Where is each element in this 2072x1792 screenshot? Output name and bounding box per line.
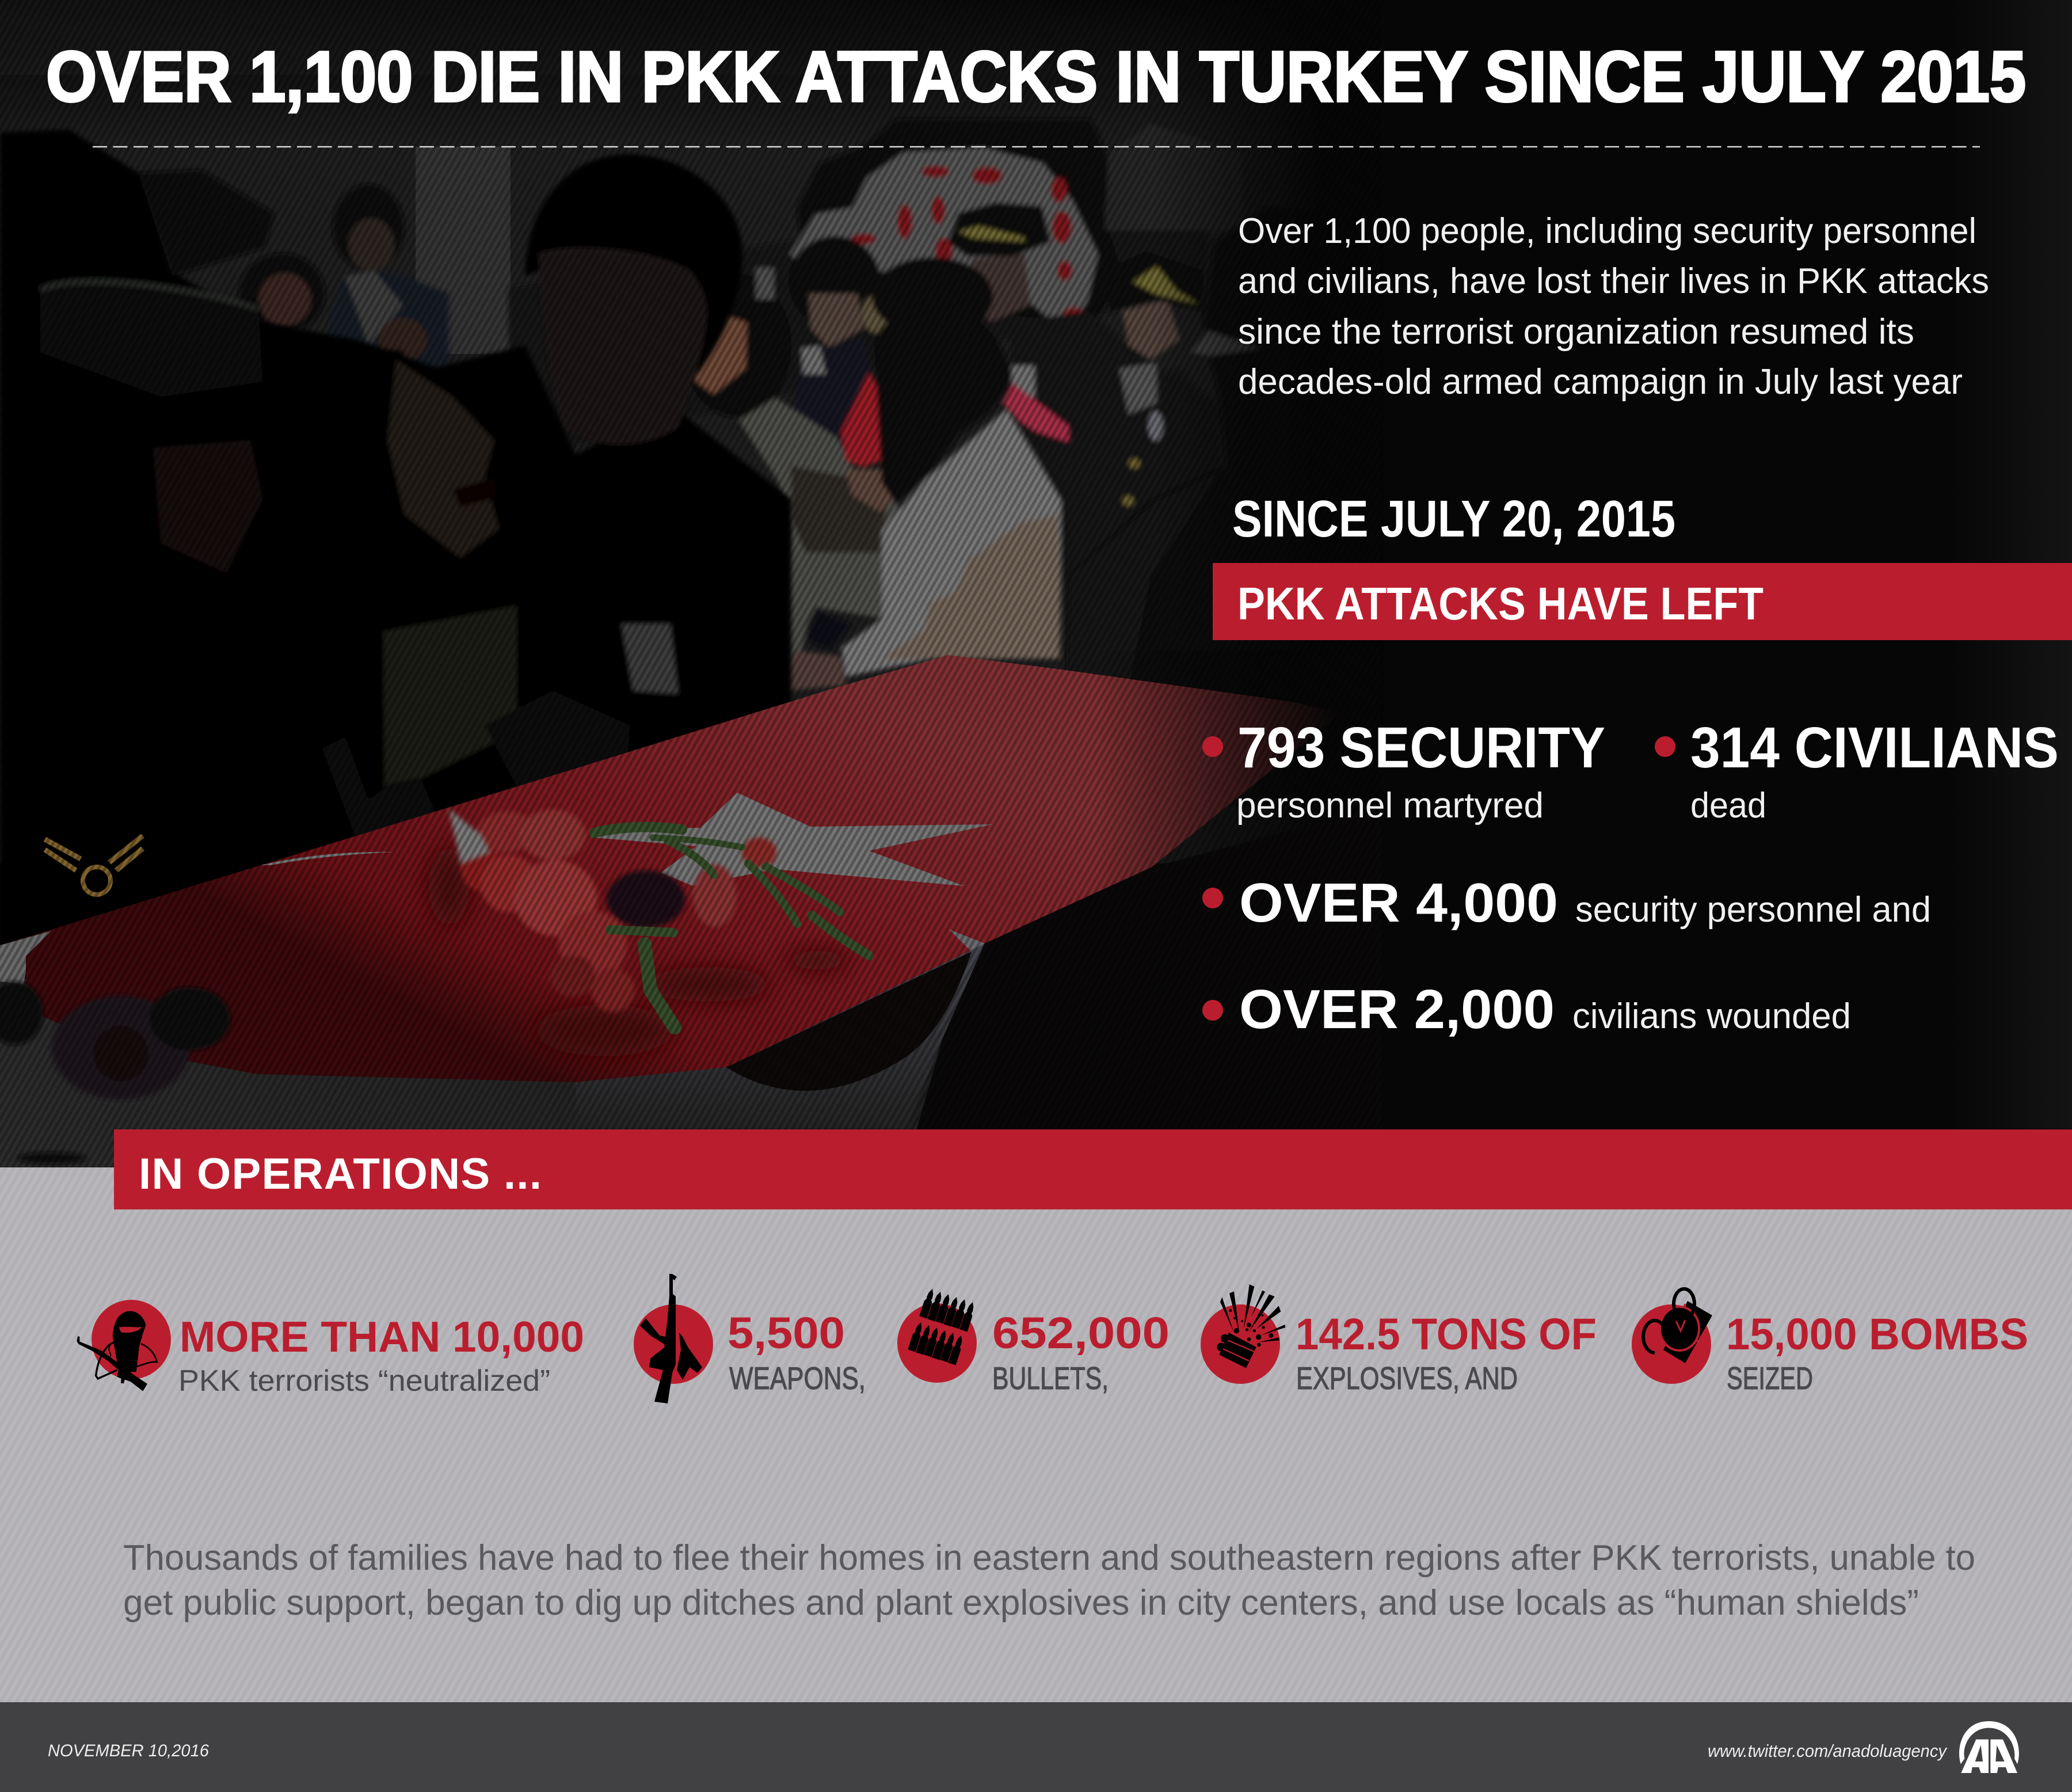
black hijab: [872, 257, 993, 336]
item: bullets: [897, 1288, 1170, 1396]
item: terrorists neutralized: PKK terrorists “neutralized”: [178, 1364, 550, 1398]
dark figure at right of the crowd: [1065, 207, 1381, 748]
intro text block: since the terrorist organization resumed its: [1238, 312, 1914, 352]
diagonal stripe overlay: [0, 0, 1381, 1167]
icon: masked fighter: [77, 1300, 171, 1391]
item: explosives: EXPLOSIVES, AND: [1296, 1360, 1518, 1396]
banner: in operations: [114, 1129, 2072, 1209]
man's head: [525, 154, 742, 374]
area under the flag: [0, 979, 978, 1167]
flag crescent sliver: [261, 852, 395, 865]
stat: over 4,000 security personnel: [1202, 872, 1931, 934]
dashed divider: [93, 146, 1980, 147]
item: bullets: 652,000: [992, 1308, 1170, 1358]
banner: in operations: IN OPERATIONS ...: [139, 1150, 542, 1199]
intro text block: [1238, 211, 1989, 402]
black crescent under the flag: [726, 952, 972, 1091]
chevrons emblem: [45, 836, 143, 895]
foreground: officers, grieving woman and soldier: [0, 130, 791, 950]
rose on the table: [0, 981, 230, 1164]
flowers on the flag: [449, 809, 776, 1012]
white cloth sliver: [949, 929, 985, 952]
footer bar: [0, 1702, 2072, 1792]
icon: exploding block: [1201, 1284, 1285, 1384]
shadows under flowers: [429, 846, 852, 1056]
photo background: funeral scene: [0, 0, 2072, 1167]
flag star: [592, 793, 992, 886]
man's jacket: [622, 624, 678, 694]
mourners in the background: [239, 119, 1241, 691]
stat: over 2,000 civilians wounded: OVER 2,000: [1239, 979, 1555, 1040]
stat: 314 civilians dead: dead: [1690, 786, 1766, 825]
lower gray panel: [0, 1167, 2072, 1703]
logo: Anadolu Agency: [1959, 1721, 2019, 1773]
item: terrorists neutralized: [77, 1300, 584, 1398]
closing paragraph: [123, 1538, 1975, 1623]
intro text block: decades-old armed campaign in July last year: [1238, 362, 1963, 402]
stat: over 2,000 civilians wounded: civilians wounded: [1572, 996, 1851, 1036]
item: explosives: 142.5 TONS OF: [1296, 1310, 1597, 1359]
icon: time bomb: [1632, 1289, 1712, 1384]
icon: rifle and pistol: [634, 1274, 713, 1403]
officers in the background: [1007, 311, 1220, 679]
item: weapons: WEAPONS,: [729, 1360, 866, 1396]
white cloth fold: [576, 943, 985, 1129]
closing paragraph: get public support, began to dig up ditches and plant explosives in city centers, and use locals as “human shields”: [123, 1583, 1919, 1623]
banner: PKK attacks have left: PKK ATTACKS HAVE LEFT: [1237, 578, 1764, 629]
date: NOVEMBER 10,2016: [48, 1741, 209, 1760]
heading: since July 20, 2015: SINCE JULY 20, 2015: [1232, 490, 1675, 548]
Turkish flag: [0, 655, 1341, 1082]
stat: 793 security personnel martyred: 793 SECURITY: [1237, 716, 1605, 780]
intro text block: and civilians, have lost their lives in PKK attacks: [1238, 261, 1989, 301]
jacket of the woman on the left: [738, 398, 900, 691]
icon: rows of bullets: [897, 1288, 977, 1383]
item: bullets: BULLETS,: [992, 1360, 1109, 1396]
stat: 793 security personnel martyred: [1202, 716, 1605, 825]
hands and frame: [351, 553, 547, 806]
stat: 793 security personnel martyred: personnel martyred: [1236, 786, 1544, 825]
background wall column: [416, 147, 511, 354]
item: weapons: [634, 1274, 866, 1403]
closing paragraph: Thousands of families have had to flee their homes in eastern and southeastern regions after PKK terrorists, unable to: [123, 1538, 1975, 1578]
item: bombs: SEIZED: [1727, 1360, 1813, 1396]
stat: over 4,000 security personnel: OVER 4,000: [1239, 872, 1558, 934]
wreath dark surround: [797, 119, 1122, 322]
item: bombs: [1632, 1289, 2028, 1396]
item: bombs: 15,000 BOMBS: [1726, 1310, 2028, 1359]
black cloth on the right: [906, 806, 1381, 1167]
stat: over 2,000 civilians wounded: [1202, 979, 1851, 1040]
item: weapons: 5,500: [728, 1308, 845, 1358]
red and pink scarves: [841, 372, 893, 467]
cream jacket: [841, 409, 1061, 677]
item: explosives: [1201, 1284, 1597, 1396]
wreath: [790, 148, 1098, 332]
item: terrorists neutralized: MORE THAN 10,000: [180, 1312, 584, 1361]
woman's hijab and face: [266, 345, 495, 599]
twitter link: www.twitter.com/anadoluagency: [1708, 1741, 1948, 1761]
back man and woman: [789, 236, 881, 328]
banner: PKK attacks have left: [1213, 563, 2072, 640]
stat: 314 civilians dead: [1655, 716, 2059, 825]
intro text block: Over 1,100 people, including security personnel: [1238, 211, 1976, 251]
stat: over 4,000 security personnel: security personnel and: [1575, 890, 1931, 930]
flower stems: [594, 827, 869, 1028]
